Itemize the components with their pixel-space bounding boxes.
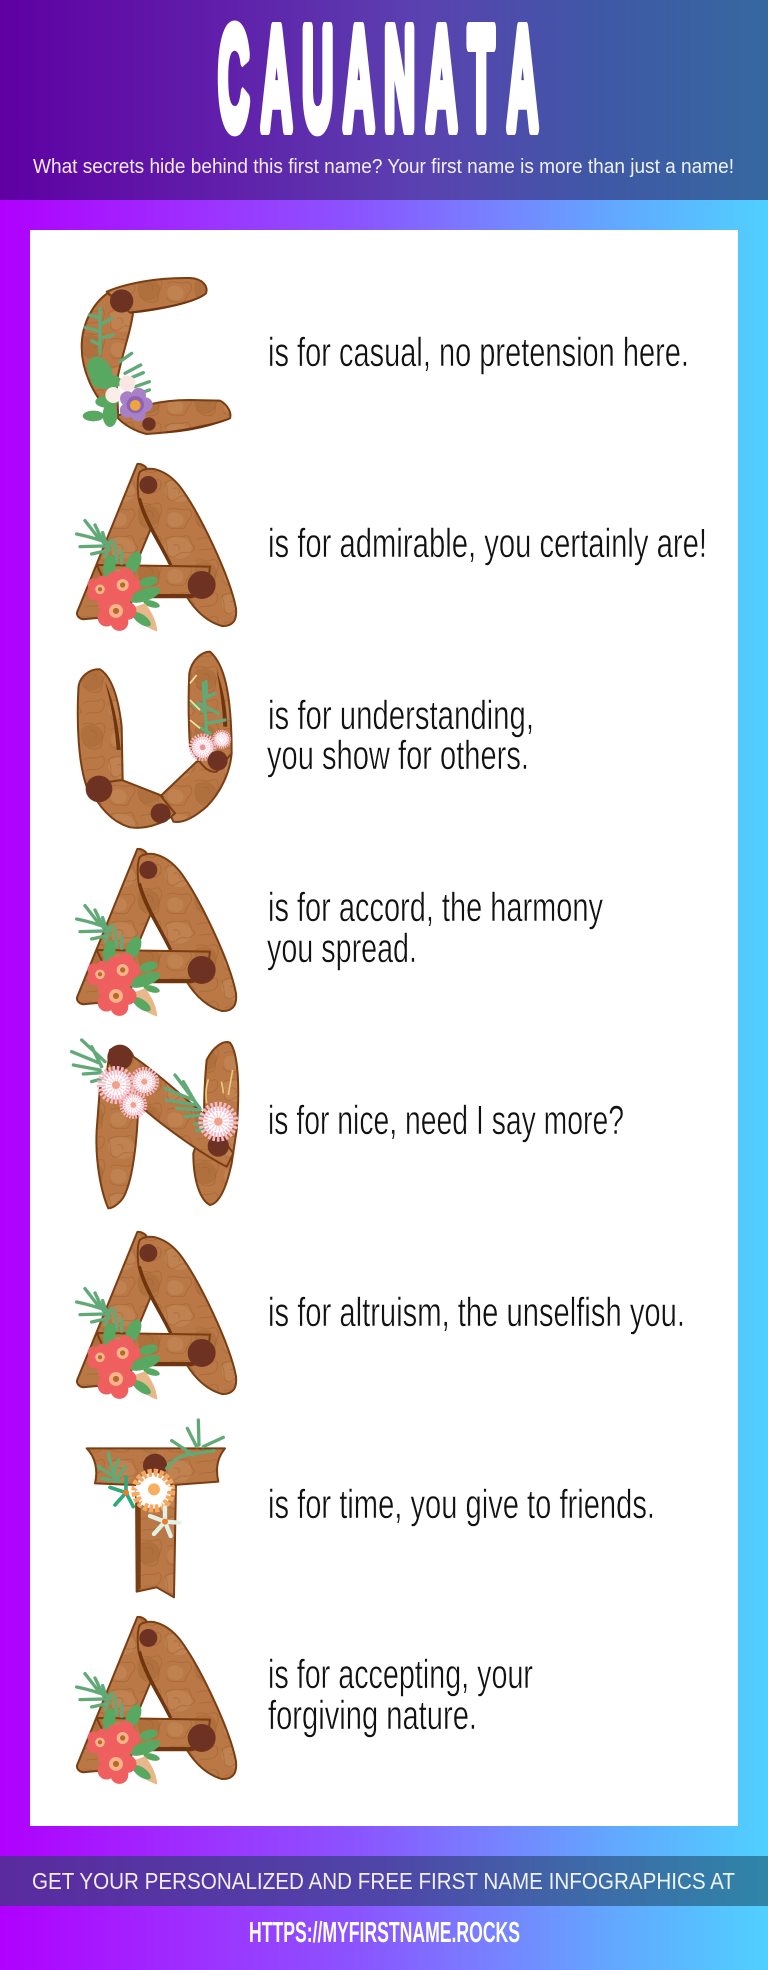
- title: CAUANATA: [218, 0, 538, 159]
- subtitle: What secrets hide behind this first name? Your first name is more than just a name!: [33, 156, 734, 178]
- line 2: you spread.: [267, 925, 417, 971]
- line 1: is for understanding,: [268, 692, 534, 738]
- letter C illustration: [82, 278, 230, 434]
- letter A illustration 1: [77, 464, 236, 632]
- white panel: [30, 230, 738, 1826]
- text: N: is for nice, need I say more?: [268, 1097, 624, 1143]
- header band: [0, 0, 768, 200]
- line 2: you show for others.: [267, 732, 529, 778]
- letter A illustration 4: [77, 1617, 236, 1785]
- text: U: [267, 692, 534, 778]
- footer band: [0, 1856, 768, 1906]
- footer URL: HTTPS://MYFIRSTNAME.ROCKS: [249, 1917, 520, 1949]
- text: A accord: [267, 884, 603, 971]
- line 2: forgiving nature.: [268, 1692, 477, 1738]
- letter N illustration: [72, 1040, 238, 1208]
- letter U illustration: [78, 652, 232, 828]
- letter A illustration 2: [77, 849, 236, 1017]
- line 1: is for accepting, your: [268, 1651, 533, 1697]
- letter A illustration 3: [77, 1232, 236, 1400]
- letter T illustration: [87, 1420, 225, 1597]
- text: A accepting: [268, 1651, 533, 1738]
- line 1: is for accord, the harmony: [268, 884, 603, 930]
